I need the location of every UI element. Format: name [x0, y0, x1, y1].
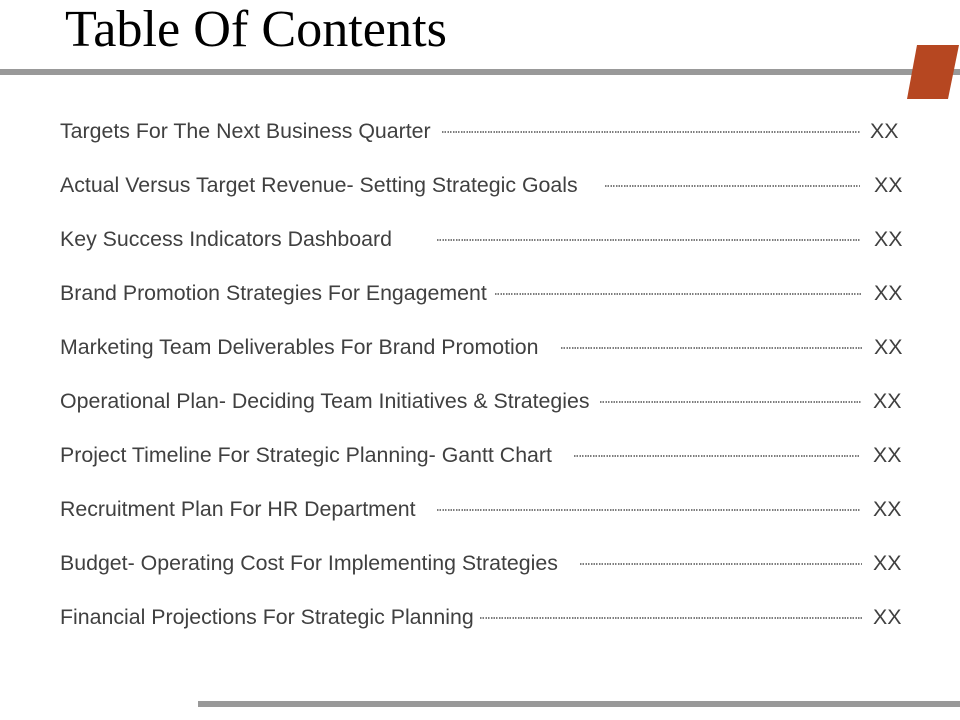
row 6: Operational Plan- Deciding Team Initiatives & Strategies [60, 389, 590, 413]
row 1: Targets For The Next Business Quarter [60, 119, 431, 143]
icon: orange parallelogram [907, 45, 959, 99]
row 3: XX [874, 227, 902, 251]
row 2 [60, 173, 902, 197]
row 3 [60, 227, 902, 251]
row 8 [60, 497, 901, 521]
row 1 [60, 119, 898, 143]
row 8: XX [873, 497, 901, 521]
bottom divider bar [198, 701, 960, 707]
row 7: Project Timeline For Strategic Planning- Gantt Chart [60, 443, 552, 467]
row 5: Marketing Team Deliverables For Brand Promotion [60, 335, 539, 359]
row 10 [60, 605, 901, 629]
row 7: XX [873, 443, 901, 467]
row 1: XX [870, 119, 898, 143]
contents list [60, 119, 902, 629]
row 4: XX [874, 281, 902, 305]
row 7 [60, 443, 901, 467]
row 9 [60, 551, 901, 575]
row 9: XX [873, 551, 901, 575]
row 4 [60, 281, 902, 305]
title: Table Of Contents [65, 0, 447, 58]
row 3: Key Success Indicators Dashboard [60, 227, 392, 251]
row 9: Budget- Operating Cost For Implementing Strategies [60, 551, 558, 575]
row 2: Actual Versus Target Revenue- Setting Strategic Goals [60, 173, 578, 197]
row 2: XX [874, 173, 902, 197]
row 10: Financial Projections For Strategic Planning [60, 605, 474, 629]
top divider bar [0, 69, 960, 75]
row 8: Recruitment Plan For HR Department [60, 497, 416, 521]
row 6 [60, 389, 901, 413]
row 5: XX [874, 335, 902, 359]
row 4: Brand Promotion Strategies For Engagement [60, 281, 487, 305]
row 6: XX [873, 389, 901, 413]
row 5 [60, 335, 902, 359]
row 10: XX [873, 605, 901, 629]
